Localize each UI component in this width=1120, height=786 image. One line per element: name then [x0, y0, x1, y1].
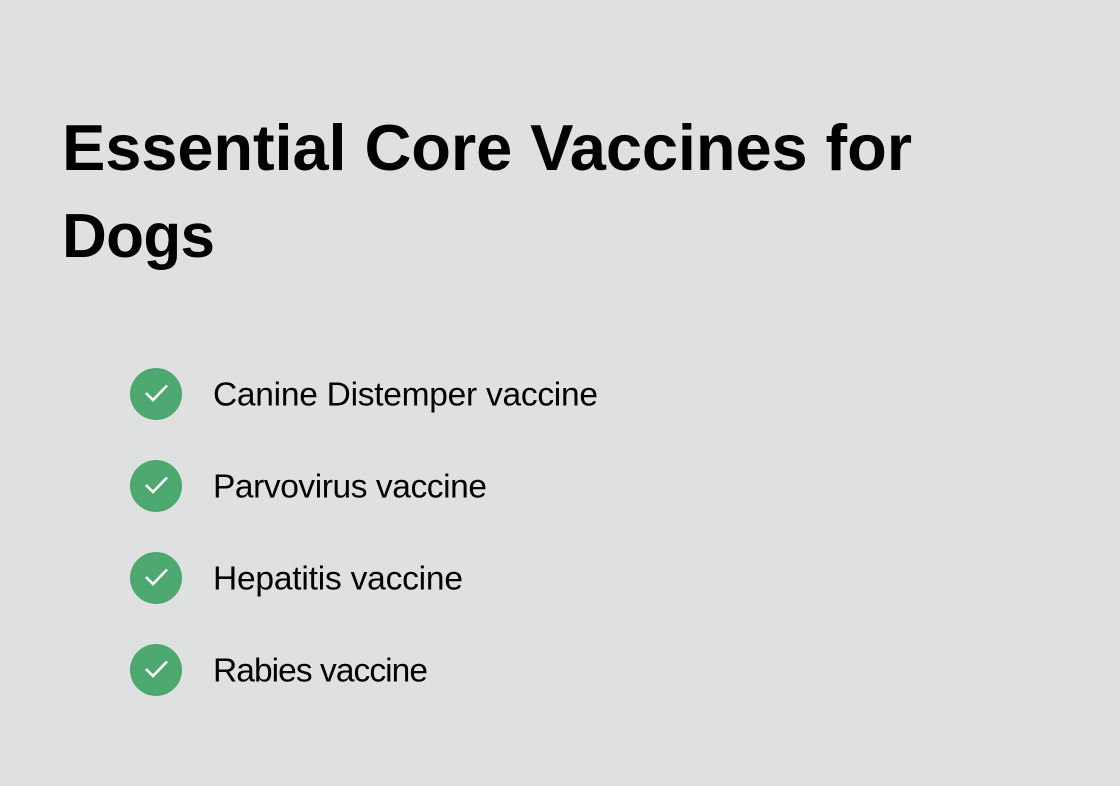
item: Hepatitis vaccine: [130, 552, 463, 604]
item: Rabies vaccine: Rabies vaccine: [213, 652, 428, 690]
title: Dogs: [62, 202, 215, 271]
title: [62, 111, 912, 271]
item: Canine Distemper vaccine: [130, 368, 598, 420]
item: Hepatitis vaccine: Hepatitis vaccine: [213, 560, 463, 598]
title: Essential Core Vaccines for: [62, 111, 912, 184]
checklist: [130, 368, 598, 696]
item: Parvovirus vaccine: Parvovirus vaccine: [213, 468, 487, 506]
item: Rabies vaccine: [130, 644, 428, 696]
item: Canine Distemper vaccine: Canine Distemper vaccine: [213, 376, 598, 414]
item: Parvovirus vaccine: [130, 460, 487, 512]
